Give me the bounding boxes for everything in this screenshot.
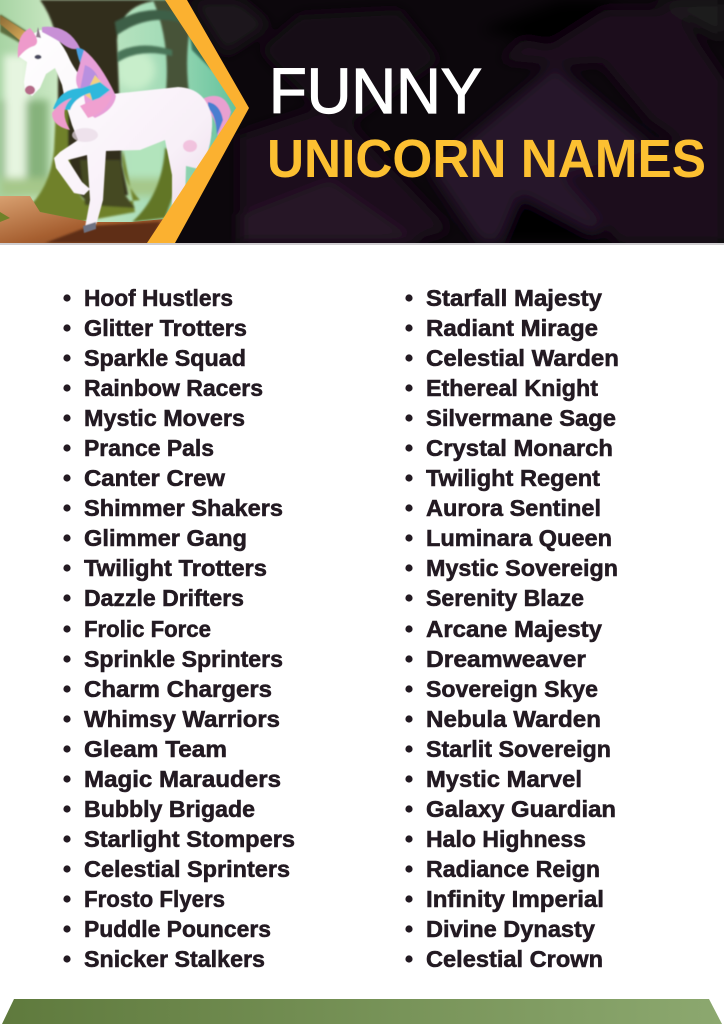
dirt path [0, 196, 175, 243]
name item: Mystic Sovereign [426, 555, 618, 581]
name item: Canter Crew [84, 465, 225, 491]
right name list [405, 285, 619, 972]
header bottom line [0, 243, 724, 245]
name item: Whimsy Warriors [84, 706, 280, 732]
hoof [83, 222, 96, 233]
name item: Twilight Regent [426, 465, 600, 491]
footer green band [2, 999, 722, 1024]
name item: Magic Marauders [84, 766, 281, 792]
name item: Arcane Majesty [426, 616, 602, 642]
name item: Mystic Movers [84, 405, 245, 431]
name item: Dreamweaver [426, 646, 586, 672]
name item: Charm Chargers [84, 676, 272, 702]
mane [18, 27, 116, 130]
horn [0, 14, 26, 40]
name item: Celestial Sprinters [84, 856, 290, 882]
name item: Halo Highness [426, 826, 586, 852]
title: FUNNY: FUNNY [269, 55, 482, 127]
name item: Silvermane Sage [426, 405, 616, 431]
name item: Celestial Crown [426, 946, 603, 972]
eye and muzzle [34, 55, 42, 59]
name item: Twilight Trotters [84, 555, 267, 581]
name item: Gleam Team [84, 736, 227, 762]
body and legs [18, 30, 212, 232]
name item: Luminara Queen [426, 525, 612, 551]
tree trunks [0, 0, 215, 222]
name item: Starlight Stompers [84, 826, 295, 852]
forest illustration with unicorn [0, 0, 245, 243]
name item: Hoof Hustlers [84, 285, 233, 311]
name item: Snicker Stalkers [84, 946, 265, 972]
name item: Starlit Sovereign [426, 736, 611, 762]
name item: Galaxy Guardian [426, 796, 616, 822]
name item: Dazzle Drifters [84, 585, 244, 611]
tail [204, 96, 231, 137]
name item: Puddle Pouncers [84, 916, 271, 942]
shading [72, 128, 98, 142]
name item: Frolic Force [84, 616, 211, 642]
name item: Shimmer Shakers [84, 495, 283, 521]
name item: Rainbow Racers [84, 375, 263, 401]
left name list [63, 285, 295, 972]
name item: Radiance Reign [426, 856, 600, 882]
name item: Divine Dynasty [426, 916, 595, 942]
name item: Radiant Mirage [426, 315, 598, 341]
name item: Mystic Marvel [426, 766, 582, 792]
name item: Sovereign Skye [426, 676, 598, 702]
name item: Infinity Imperial [426, 886, 604, 912]
yellow chevron band [147, 0, 249, 243]
name item: Crystal Monarch [426, 435, 613, 461]
dark geometric background [175, 0, 724, 243]
name item: Starfall Majesty [426, 285, 602, 311]
name item: Frosto Flyers [84, 886, 225, 912]
name item: Sparkle Squad [84, 345, 246, 371]
name item: Nebula Warden [426, 706, 601, 732]
name item: Serenity Blaze [426, 585, 584, 611]
name item: Glimmer Gang [84, 525, 247, 551]
forest background [0, 0, 236, 222]
name item: Sprinkle Sprinters [84, 646, 283, 672]
unicorn [0, 15, 231, 233]
name item: Aurora Sentinel [426, 495, 601, 521]
name item: Celestial Warden [426, 345, 619, 371]
name item: Glitter Trotters [84, 315, 247, 341]
header banner [0, 0, 724, 243]
name item: Ethereal Knight [426, 375, 598, 401]
name item: Bubbly Brigade [84, 796, 255, 822]
name item: Prance Pals [84, 435, 214, 461]
title: UNICORN NAMES: UNICORN NAMES [267, 129, 706, 189]
